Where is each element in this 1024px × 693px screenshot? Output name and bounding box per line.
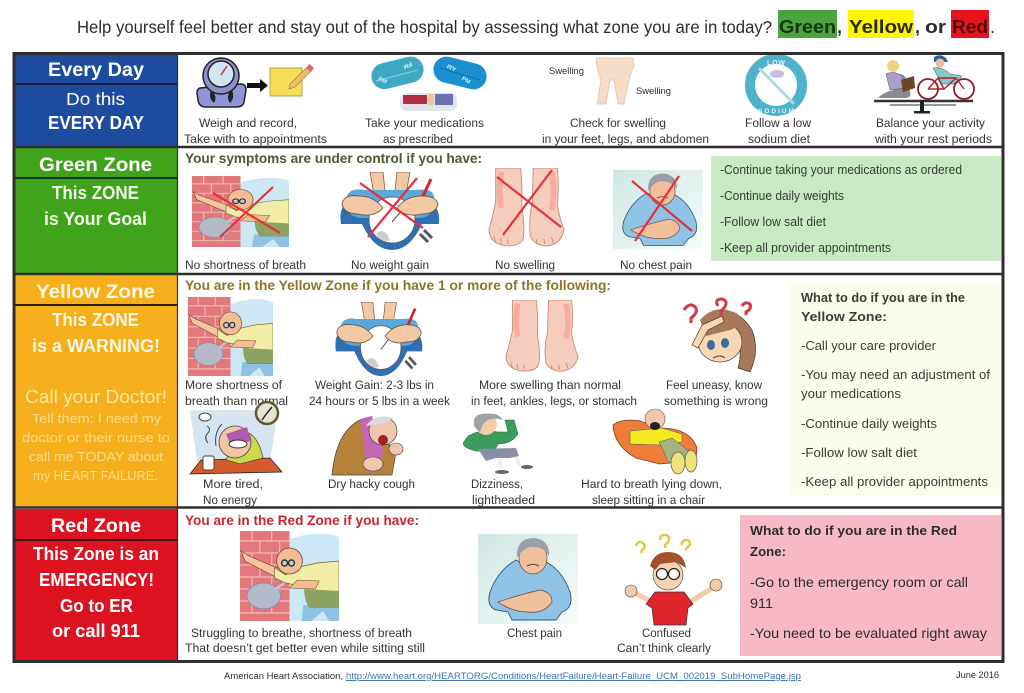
caption: take medications: Take your medications	[365, 116, 484, 130]
icon: low sodium: SODIUM	[758, 108, 794, 115]
icon: no weight gain	[340, 172, 439, 250]
panel: every day header: EVERY DAY	[48, 113, 144, 133]
panel: yellow zone header: my HEART FAILURE.	[33, 468, 158, 483]
caption: tired: No energy	[203, 493, 258, 507]
panel: red zone symptoms	[185, 513, 722, 655]
title: .	[990, 17, 995, 37]
caption: feel uneasy: something is wrong	[664, 394, 768, 408]
caption: check swelling: Check for swelling	[570, 116, 666, 130]
callout: green zone actions: -Continue taking your medications as ordered	[720, 163, 962, 177]
caption: no shortness of breath: No shortness of breath	[185, 258, 306, 272]
icon: struggling to breathe	[240, 531, 339, 621]
caption: weight gain	[309, 378, 451, 408]
caption: struggling: That doesn’t get better even while sitting still	[185, 641, 425, 655]
icon: legs with swelling labels	[549, 58, 671, 104]
caption: no chest pain: No chest pain	[620, 258, 692, 272]
caption: low sodium diet: Follow a low	[745, 116, 811, 130]
caption: more shortness: breath than normal	[185, 394, 288, 408]
icon: pill boxes: PM	[460, 76, 471, 86]
caption: hard to breathe: Hard to breath lying down,	[581, 477, 722, 491]
caption: low sodium diet	[745, 116, 811, 146]
caption: more swelling: More swelling than normal	[479, 378, 621, 392]
footer source: http://www.heart.org/HEARTORG/Conditions/HeartFailure/Heart-Failure_UCM_002019_SubHomePage.jsp	[346, 671, 801, 682]
caption: check swelling: in your feet, legs, and abdomen	[542, 132, 709, 146]
panel: every day items	[184, 54, 992, 146]
caption: dizziness	[471, 477, 535, 507]
title: Help yourself feel better and stay out of the hospital by assessing what zone you are in today?	[77, 17, 772, 37]
callout: red zone actions: -Go to the emergency room or call	[750, 575, 968, 590]
caption: confused: Can’t think clearly	[617, 641, 712, 655]
callout: green zone actions	[711, 156, 1001, 261]
caption: tired: More tired,	[203, 477, 263, 491]
caption: balance activity	[874, 116, 992, 146]
caption: dizziness: Dizziness,	[471, 477, 523, 491]
caption: more swelling: in feet, ankles, legs, or stomach	[471, 394, 637, 408]
caption: weigh and record	[184, 116, 327, 146]
caption: tired	[203, 477, 263, 507]
title: ,	[915, 17, 920, 37]
icon: no chest pain	[613, 170, 703, 249]
title: Red	[952, 17, 988, 37]
caption: feel uneasy: Feel uneasy, know	[666, 378, 762, 392]
callout: yellow zone actions: -Keep all provider appointments	[801, 475, 988, 489]
panel: green zone header: Green Zone	[39, 155, 152, 176]
icon: balance rest and activity	[874, 55, 974, 114]
icon: legs with swelling labels: Swelling	[549, 66, 584, 76]
panel: every day header: Every Day	[48, 60, 144, 81]
callout: yellow zone actions: -Follow low salt diet	[801, 446, 918, 460]
caption: cough: Dry hacky cough	[328, 477, 415, 491]
caption: take medications	[365, 116, 484, 146]
title: or	[925, 17, 946, 37]
icon: bathroom scale with arrow and note	[197, 58, 314, 107]
panel: yellow zone header: is a WARNING!	[32, 336, 160, 356]
panel: red zone header	[15, 509, 177, 660]
panel: green zone header: This ZONE	[52, 183, 139, 203]
title: Yellow	[849, 17, 914, 37]
panel: yellow zone header	[15, 275, 177, 507]
icon: person sleeping in chair	[613, 409, 697, 474]
icon: coughing person	[332, 416, 403, 475]
title	[77, 10, 995, 38]
icon: weight gain	[335, 302, 422, 376]
caption: chest pain: Chest pain	[507, 626, 562, 640]
callout: yellow zone actions: your medications	[801, 387, 901, 401]
callout: red zone actions: -You need to be evaluated right away	[750, 626, 987, 641]
caption: more swelling	[471, 378, 637, 408]
caption: confused: Confused	[642, 626, 691, 640]
callout: yellow zone actions: -Call your care provider	[801, 339, 936, 353]
panel: yellow zone header: Call your Doctor!	[25, 387, 167, 407]
caption: dizziness: lightheaded	[472, 493, 535, 507]
callout: green zone actions: -Keep all provider appointments	[720, 241, 891, 255]
icon: tired person	[190, 402, 282, 474]
callout: yellow zone actions: -You may need an adjustment of	[801, 368, 991, 382]
callout: yellow zone actions	[790, 283, 1001, 495]
panel: every day header: Do this	[66, 89, 125, 109]
caption: more shortness	[185, 378, 288, 408]
caption: weight gain: Weight Gain: 2-3 lbs in	[315, 378, 434, 392]
heading: red zone: You are in the Red Zone if you have:	[185, 513, 419, 528]
icon: pill boxes: PM	[402, 60, 413, 69]
callout: red zone actions: Zone:	[750, 544, 786, 559]
caption: low sodium diet: sodium diet	[748, 132, 811, 146]
icon: no swelling	[489, 168, 564, 246]
panel: red zone header: EMERGENCY!	[39, 570, 154, 590]
caption: struggling: Struggling to breathe, shortness of breath	[191, 626, 412, 640]
panel: yellow zone header: Tell them: I need my	[32, 411, 161, 426]
callout: green zone actions: -Continue daily weights	[720, 189, 844, 203]
heading: yellow zone: You are in the Yellow Zone if you have 1 or more of the following:	[185, 278, 611, 293]
caption: no swelling: No swelling	[495, 258, 555, 272]
panel: every day header	[15, 54, 177, 146]
caption: balance activity: Balance your activity	[876, 116, 986, 130]
panel: red zone header: Go to ER	[60, 596, 133, 616]
caption: hard to breathe: sleep sitting in a chair	[592, 493, 705, 507]
panel: yellow zone header: call me TODAY about	[29, 449, 163, 464]
icon: pill boxes: AM	[376, 76, 388, 86]
panel: yellow zone header: doctor or their nurse to	[22, 430, 170, 445]
caption: weight gain: 24 hours or 5 lbs in a week	[309, 394, 451, 408]
panel: yellow zone symptoms	[185, 278, 768, 507]
caption: feel uneasy	[664, 378, 768, 408]
callout: yellow zone actions: What to do if you are in the	[801, 291, 965, 305]
panel: red zone header: This Zone is an	[33, 544, 159, 564]
panel: red zone header: Red Zone	[51, 516, 141, 537]
callout: yellow zone actions: -Continue daily weights	[801, 417, 937, 431]
icon: low sodium: LOW	[767, 60, 785, 67]
caption: struggling	[185, 626, 425, 655]
caption: hard to breathe	[581, 477, 722, 507]
panel: red zone header: or call 911	[52, 621, 140, 641]
panel: yellow zone header: Yellow Zone	[36, 282, 155, 303]
icon: pill boxes: AM	[447, 62, 458, 71]
panel: green zone header	[15, 148, 177, 273]
caption: more shortness: More shortness of	[185, 378, 283, 392]
caption: check swelling	[542, 116, 709, 146]
panel: green zone header: is Your Goal	[44, 209, 147, 229]
icon: chest pain	[478, 534, 578, 624]
panel: yellow zone header: This ZONE	[52, 310, 139, 330]
title: ,	[837, 17, 842, 37]
callout: red zone actions: What to do if you are in the Red	[750, 523, 957, 538]
icon: no shortness of breath	[192, 176, 289, 247]
callout: red zone actions	[740, 515, 1001, 656]
caption: take medications: as prescribed	[383, 132, 453, 146]
title: Green	[779, 17, 836, 37]
callout: red zone actions: 911	[750, 596, 773, 611]
icon: dizzy person	[463, 413, 533, 474]
caption: weigh and record: Take with to appointments	[184, 132, 327, 146]
callout: green zone actions: -Follow low salt diet	[720, 215, 826, 229]
footer date: June 2016	[956, 670, 999, 681]
icon: pill boxes	[369, 54, 489, 111]
icon: legs with swelling labels: Swelling	[636, 86, 671, 96]
icon: low sodium	[750, 59, 802, 115]
icon: shortness of breath	[188, 297, 273, 376]
icon: uneasy woman	[684, 299, 756, 372]
caption: balance activity: with your rest periods	[874, 132, 992, 146]
heading: green zone: Your symptoms are under control if you have:	[185, 151, 482, 166]
caption: weigh and record: Weigh and record,	[199, 116, 297, 130]
icon: confused child	[625, 535, 722, 625]
caption: no weight gain: No weight gain	[351, 258, 429, 272]
footer source: American Heart Association,	[224, 671, 343, 682]
callout: yellow zone actions: Yellow Zone:	[801, 310, 887, 324]
panel: green zone symptoms	[185, 151, 703, 272]
caption: confused	[617, 626, 712, 655]
icon: swelling	[506, 300, 578, 371]
